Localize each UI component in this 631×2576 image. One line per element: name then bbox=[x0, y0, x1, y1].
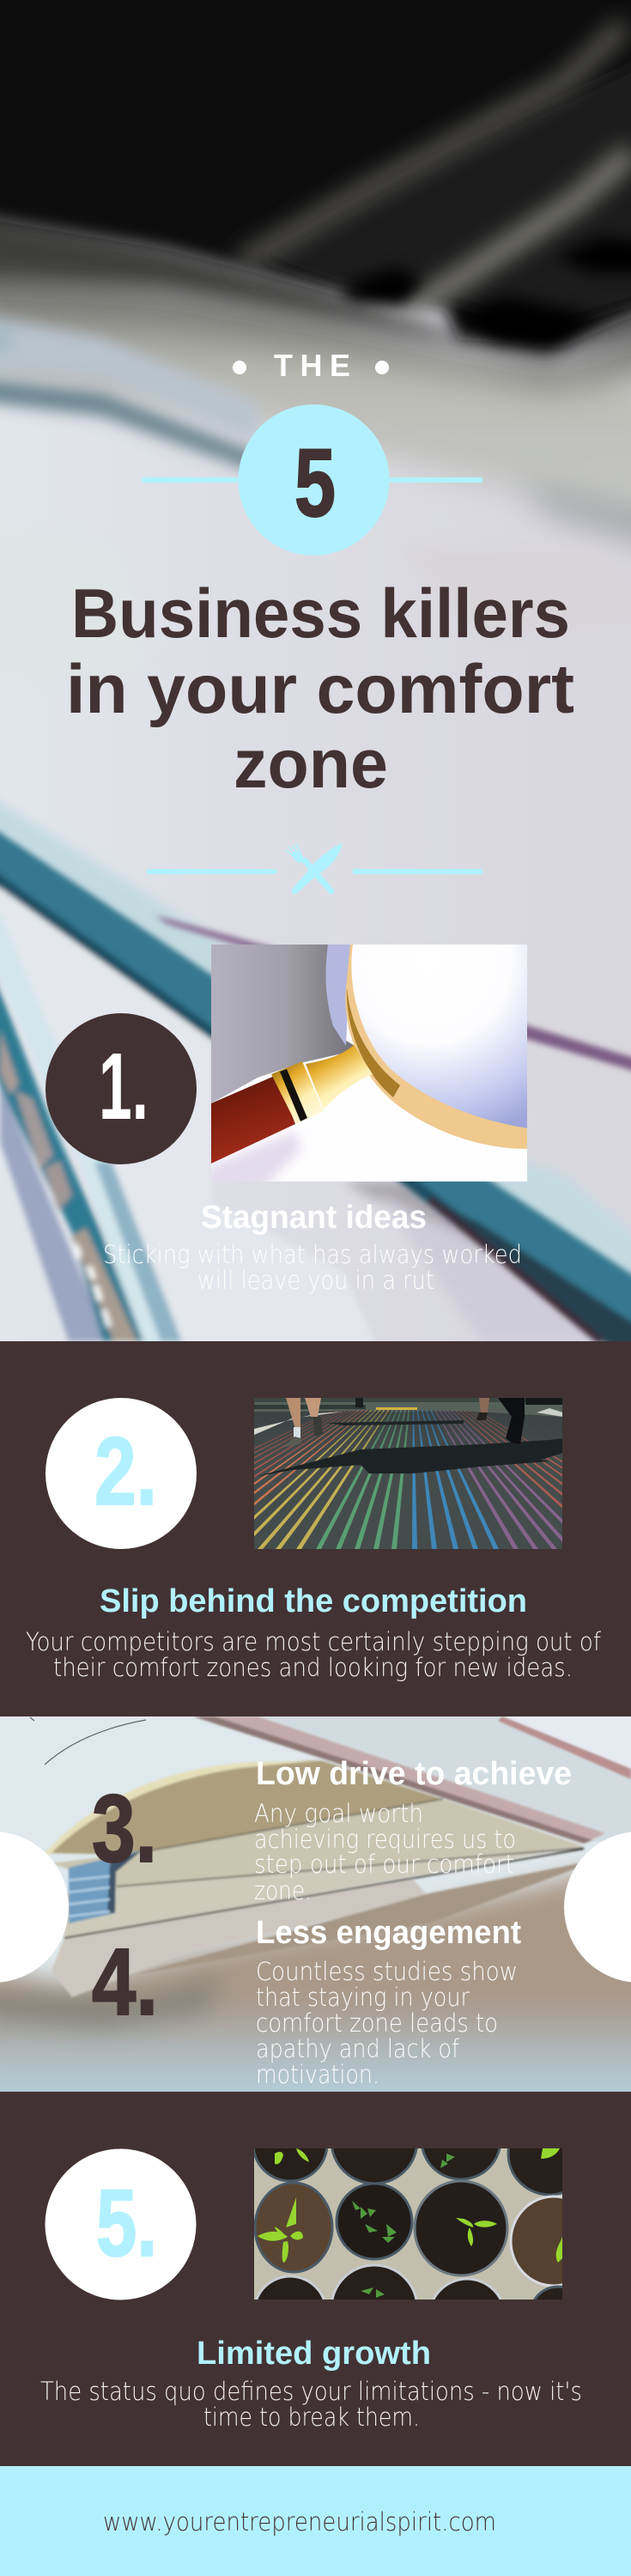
step 3 text: low drive to achieve bbox=[254, 1756, 572, 1905]
step 5 text: limited growth: The status quo defines your limitations - now it's bbox=[40, 2377, 582, 2406]
step 5 badge bbox=[45, 2148, 196, 2300]
step 1 badge: 1. bbox=[99, 1034, 149, 1139]
left white half circle bbox=[0, 1832, 69, 1983]
panel: step 2 dark band bbox=[0, 1341, 631, 1716]
step 1 text: stagnant ideas: will leave you in a rut bbox=[197, 1266, 434, 1295]
step 3 text: low drive to achieve: zone. bbox=[254, 1876, 312, 1905]
title: in your comfort bbox=[66, 651, 574, 728]
title: Business killers bbox=[71, 575, 570, 653]
step 2 text: slip behind the competition bbox=[26, 1583, 602, 1682]
step 2 badge: 2. bbox=[94, 1418, 157, 1525]
title: zone bbox=[234, 726, 388, 803]
divider with fork and knife icon bbox=[147, 843, 482, 894]
step 3 text: low drive to achieve: achieving requires us to bbox=[254, 1825, 516, 1854]
photo: rainbow crosswalk bbox=[254, 1398, 562, 1549]
step 3 text: low drive to achieve: Low drive to achieve bbox=[256, 1756, 572, 1792]
panel: step 5 dark band bbox=[0, 2092, 631, 2466]
panel: hero background photo of blurred laptop and pencils bbox=[0, 0, 631, 1374]
step 3 text: low drive to achieve: step out of our comfort bbox=[254, 1850, 514, 1879]
right white half circle bbox=[564, 1832, 631, 1983]
footer url: www.yourentrepreneurialspirit.com bbox=[103, 2507, 496, 2537]
step 2 text: slip behind the competition: their comfort zones and looking for new ideas. bbox=[53, 1653, 573, 1682]
step 4 text: less engagement: motivation. bbox=[256, 2060, 379, 2089]
step 1 text: stagnant ideas bbox=[103, 1200, 522, 1295]
step 5 text: limited growth bbox=[40, 2336, 582, 2432]
step 4 text: less engagement: that staying in your bbox=[256, 1983, 470, 2012]
step 5 text: limited growth: time to break them. bbox=[203, 2403, 420, 2432]
step 4 text: less engagement: Less engagement bbox=[256, 1915, 521, 1951]
badge: number 5 with side lines: 5 bbox=[294, 429, 336, 537]
footer band bbox=[0, 2466, 631, 2576]
step 1 text: stagnant ideas: Stagnant ideas bbox=[201, 1200, 427, 1236]
eyebrow: the bbox=[233, 348, 389, 383]
step 3 text: low drive to achieve: Any goal worth bbox=[254, 1799, 423, 1828]
number 4: 4. bbox=[92, 1929, 158, 2035]
panel: steps 3 and 4 book photo background bbox=[0, 1716, 631, 2121]
photo: seedlings in pots bbox=[254, 2148, 562, 2300]
step 1 text: stagnant ideas: Sticking with what has always worked bbox=[103, 1240, 522, 1269]
step 4 text: less engagement: apathy and lack of bbox=[256, 2034, 460, 2063]
title bbox=[66, 575, 574, 803]
photo: magnifying glass bbox=[206, 945, 527, 1194]
step 4 text: less engagement: comfort zone leads to bbox=[256, 2008, 498, 2038]
step 4 text: less engagement: Countless studies show bbox=[256, 1957, 518, 1986]
step 5 badge: 5. bbox=[96, 2171, 157, 2276]
number 3: 3. bbox=[92, 1776, 157, 1882]
step 4 text: less engagement bbox=[256, 1915, 521, 2089]
step 2 badge bbox=[46, 1398, 197, 1549]
step 1 badge bbox=[46, 1013, 197, 1164]
step 5 text: limited growth: Limited growth bbox=[197, 2336, 431, 2372]
badge: number 5 with side lines bbox=[143, 404, 482, 556]
step 2 text: slip behind the competition: Slip behind the competition bbox=[100, 1583, 527, 1619]
eyebrow: the: THE bbox=[274, 348, 350, 383]
